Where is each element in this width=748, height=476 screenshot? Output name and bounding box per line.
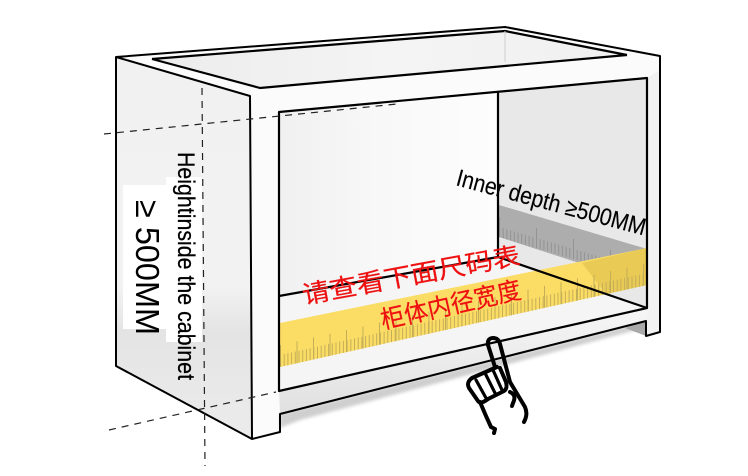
text: inner depth: Inner depth ≥500MM xyxy=(453,165,649,241)
ruler: depth (grey) xyxy=(499,205,645,262)
panel: inner floor xyxy=(279,257,647,391)
ruler: width (yellow) xyxy=(280,248,647,367)
text: red inner width note: 柜体内径宽度 xyxy=(378,276,524,335)
panel: inner back wall xyxy=(279,92,498,296)
dashed guide lines xyxy=(104,88,397,466)
panel: right post xyxy=(646,70,660,336)
panel: left side xyxy=(116,58,252,439)
text: red check size note: 请查看下面尺码表 xyxy=(300,242,522,310)
cabinet outlines xyxy=(116,27,660,439)
panel: front lip xyxy=(279,308,647,414)
text: height value: ≥ 500MM xyxy=(129,200,166,335)
panel: top opening xyxy=(152,31,627,88)
panel: inner right wall xyxy=(498,78,647,308)
text: height inside the cabinet: Heightinside the cabinet xyxy=(172,152,199,380)
shadow under cabinet xyxy=(280,323,640,428)
icon: pointing hand xyxy=(468,338,526,433)
label backing patches xyxy=(123,177,202,342)
cabinet xyxy=(116,27,660,439)
panel: front frame xyxy=(116,27,660,439)
foot shadow xyxy=(625,321,646,336)
